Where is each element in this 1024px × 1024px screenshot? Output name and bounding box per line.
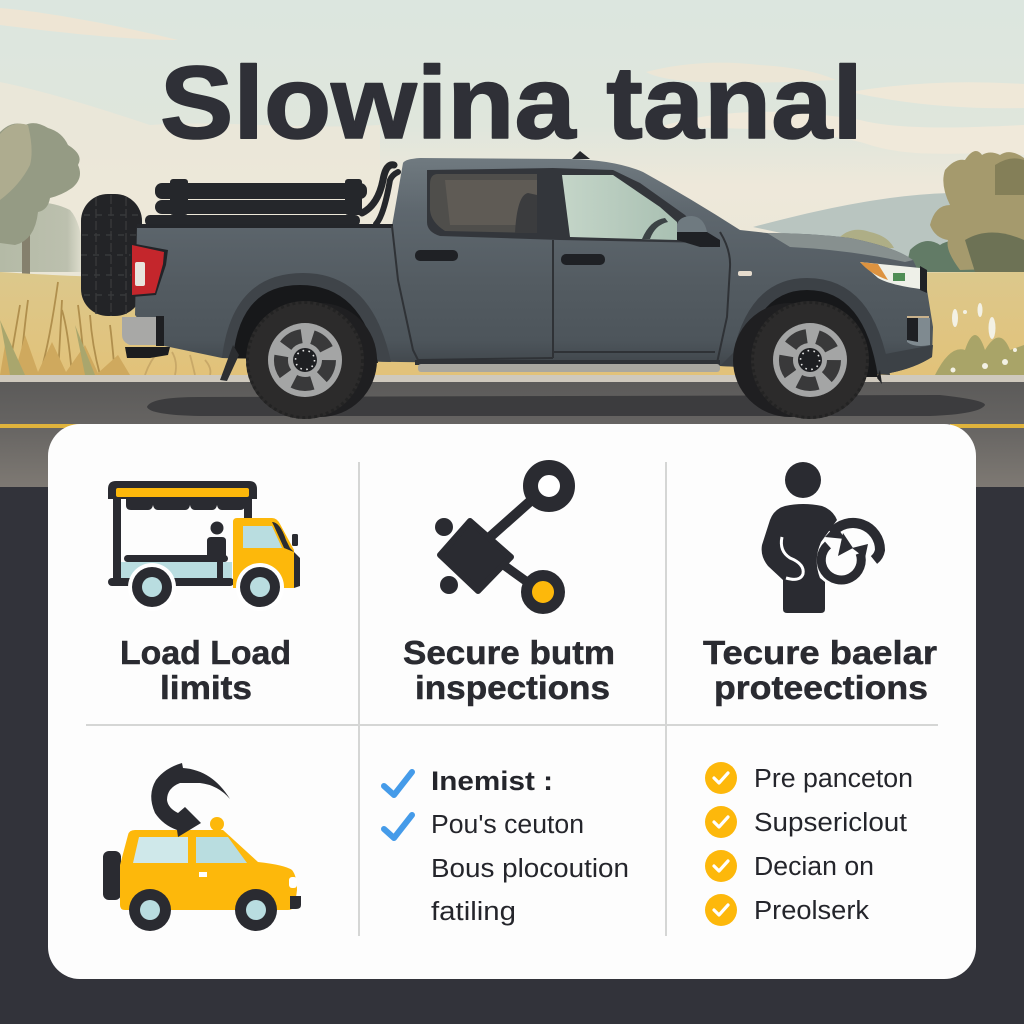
side step (415, 360, 720, 372)
field (0, 272, 1024, 376)
taillight (130, 243, 168, 297)
rear wheel (246, 301, 377, 419)
front wheel arch (720, 278, 890, 384)
checklist: blue ticks: fatiling (431, 898, 516, 926)
bed top rail (137, 224, 393, 228)
pickup truck (81, 151, 985, 419)
icon: food truck (108, 481, 300, 611)
rear wheel arch (220, 273, 391, 381)
heading: load limits (120, 634, 291, 706)
checklist: yellow ticks: Preolserk (754, 897, 869, 925)
front window (562, 175, 677, 240)
grass right (935, 303, 1024, 376)
checklist: blue ticks: Pou's ceuton (431, 811, 584, 839)
mirror (677, 216, 720, 247)
heading: protections: proteections (714, 669, 928, 706)
checklist: yellow ticks: Decian on (754, 853, 874, 881)
grass left (0, 282, 210, 375)
title: Slowina tanal (160, 45, 863, 160)
left tree (0, 123, 84, 274)
heading: inspections: inspections (415, 669, 610, 706)
icon: yellow car with arrow (103, 763, 301, 931)
side marker (738, 271, 752, 276)
checklist: yellow ticks: Pre panceton (754, 765, 913, 793)
checklist: blue ticks (384, 766, 629, 926)
heading: protections (703, 634, 937, 706)
headlight (860, 262, 927, 293)
white card panel (48, 424, 976, 979)
front wheel (733, 301, 869, 419)
rear window (430, 174, 537, 233)
checklist: blue ticks: Inemist : (431, 766, 553, 796)
checklist: yellow ticks: Supsericlout (754, 809, 907, 837)
truck body (135, 158, 933, 373)
right tree (930, 151, 1024, 272)
icon: linkage (435, 468, 568, 608)
hood highlight (767, 233, 913, 262)
checklist: yellow ticks (705, 762, 913, 926)
checklist: blue ticks: Bous plocoution (431, 855, 629, 883)
front bumper (880, 316, 933, 373)
window frames (427, 168, 713, 243)
heading: load limits: Load Load (120, 634, 291, 671)
heading: protections: Tecure baelar (703, 634, 937, 671)
ground shadow (147, 395, 985, 416)
door lines and handles (392, 226, 730, 363)
heading: inspections: Secure butm (403, 634, 615, 671)
rear bumper and step (122, 316, 170, 358)
spare tire (81, 194, 142, 316)
heading: inspections (403, 634, 615, 706)
icon: person with rotation arrows (762, 462, 880, 613)
heading: load limits: limits (160, 669, 252, 706)
roof rack (145, 165, 398, 226)
roof fin (572, 151, 590, 159)
road (0, 375, 1024, 487)
